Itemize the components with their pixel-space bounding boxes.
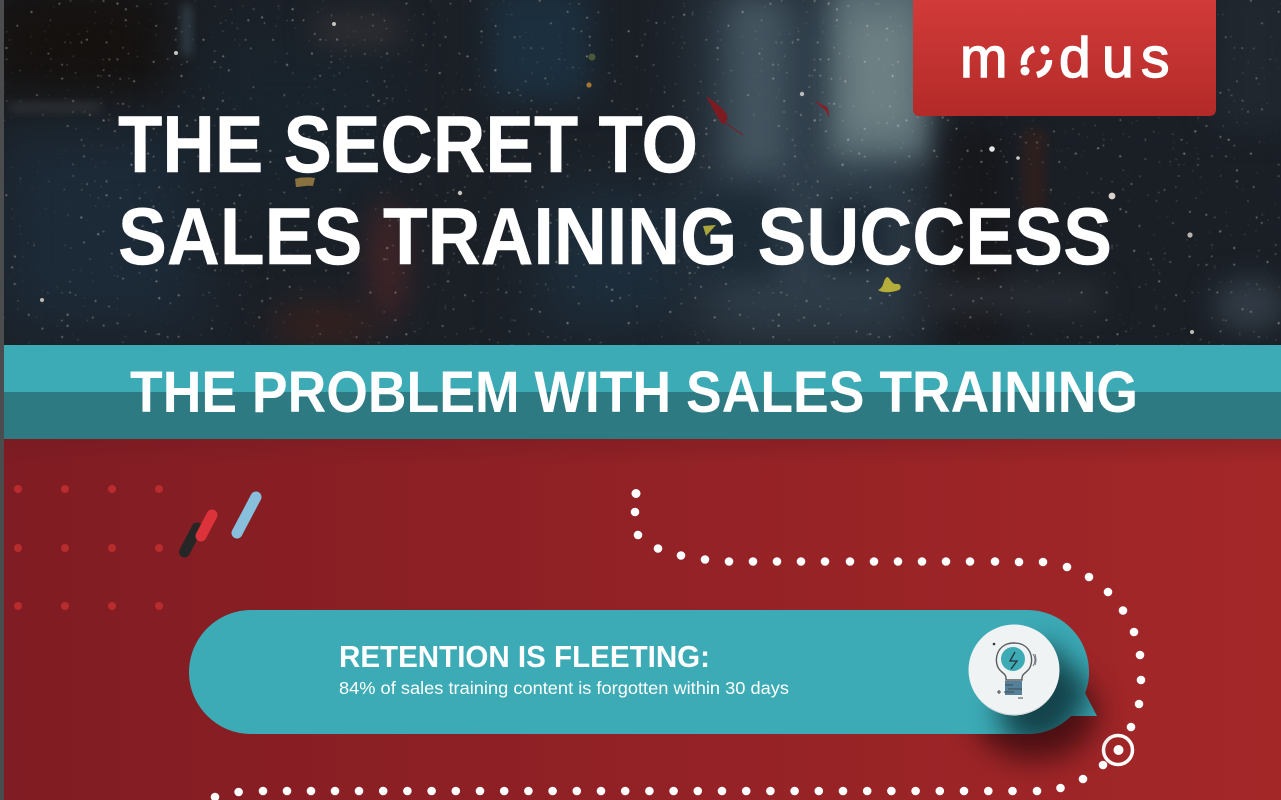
title: THE SECRET TO	[118, 100, 698, 190]
hero photo background	[0, 0, 1281, 360]
callout heading: RETENTION IS FLEETING:	[339, 639, 710, 674]
callout body text: 84% of sales training content is forgotten within 30 days	[339, 678, 789, 698]
red panel	[4, 439, 1281, 800]
logo: modus: m	[960, 26, 1007, 90]
title: SALES TRAINING SUCCESS	[118, 192, 1112, 282]
section banner	[4, 345, 1281, 439]
left edge strip	[0, 0, 4, 800]
bubble outer shadow	[973, 664, 1097, 760]
decorative dot grid	[14, 485, 163, 610]
dotted route line	[211, 489, 1145, 800]
logo: modus: dus	[1059, 26, 1170, 90]
route target marker	[1104, 736, 1132, 764]
callout bubble: retention is fleeting	[189, 610, 1097, 745]
banner heading: THE PROBLEM WITH SALES TRAINING	[130, 360, 1138, 425]
title	[118, 100, 1112, 282]
logo: modus	[913, 0, 1216, 116]
paint flecks and large drops	[40, 22, 1194, 334]
decorative slashes	[184, 497, 256, 552]
icon: light bulb badge	[968, 624, 1060, 716]
logo stylised letter o	[1020, 46, 1050, 76]
